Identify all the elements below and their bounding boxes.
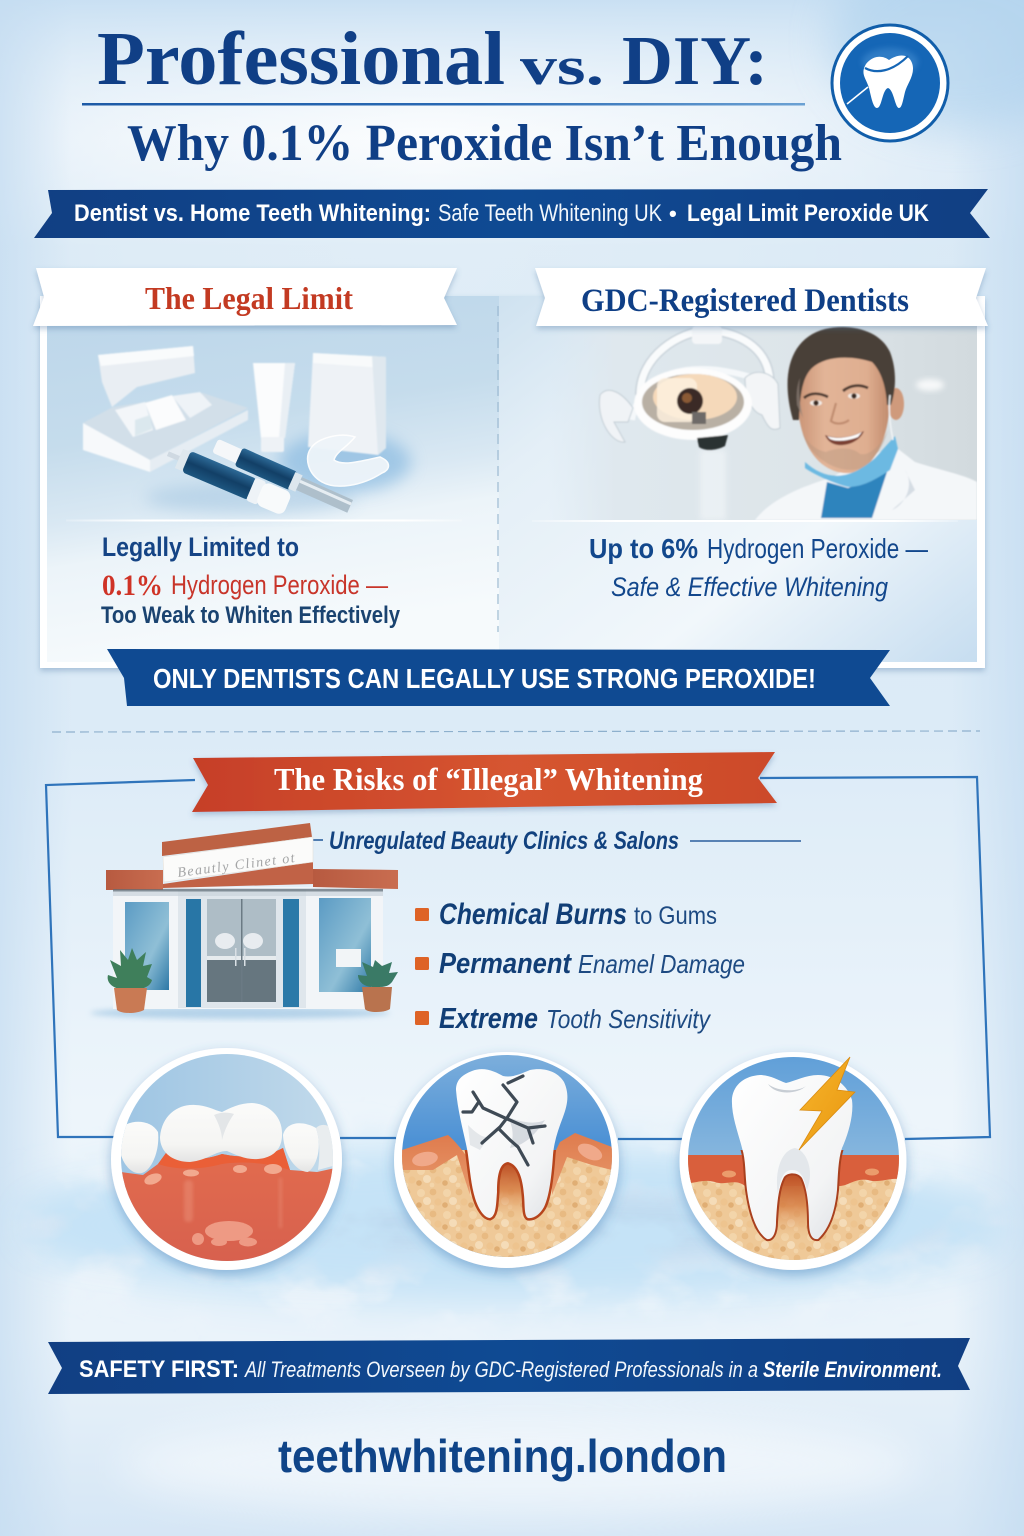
title: DIY:	[622, 23, 768, 100]
website url: teethwhitening.london	[278, 1430, 727, 1482]
text: dentists: Hydrogen Peroxide —	[707, 533, 928, 564]
text: dentists: Safe & Effective Whitening	[611, 572, 888, 602]
syringe front	[163, 442, 292, 516]
text: dentists: Up to 6%	[589, 533, 698, 564]
title: Professional	[97, 17, 505, 101]
plant right	[358, 960, 398, 1012]
icon: tooth badge	[832, 25, 948, 141]
top banner: Legal Limit Peroxide UK	[687, 200, 930, 227]
text: legal limit	[101, 532, 401, 629]
illustration: beauty salon	[90, 823, 398, 1019]
circle: chemical burns to gums	[110, 1045, 350, 1285]
text: legal limit: Too Weak to Whiten Effectively	[101, 602, 401, 629]
title	[97, 17, 768, 101]
dentist	[755, 327, 977, 520]
ribbon: GDC-Registered Dentists	[535, 268, 988, 326]
dental lamp	[599, 326, 780, 450]
building	[113, 887, 383, 1009]
subtitle: Why 0.1% Peroxide Isn’t Enough	[127, 115, 842, 172]
text: legal limit: Hydrogen Peroxide —	[171, 570, 388, 600]
kit box	[83, 346, 248, 472]
ribbon: The Legal Limit	[33, 268, 457, 326]
tube	[253, 363, 295, 452]
ribbon: risks heading	[192, 752, 777, 812]
item: sensitivity: Tooth Sensitivity	[546, 1004, 712, 1034]
top banner: Dentist vs. Home Teeth Whitening:	[74, 200, 431, 227]
list: risks	[415, 898, 745, 1035]
circle: cracked tooth enamel damage	[394, 1050, 620, 1275]
item: sensitivity: Extreme	[439, 1003, 538, 1035]
divider line right	[532, 520, 958, 522]
item: enamel damage: Permanent	[439, 948, 572, 980]
photo: dentist with lamp	[598, 326, 977, 520]
roof	[106, 870, 163, 890]
panel: comparison	[40, 296, 985, 668]
item: chemical burns: to Gums	[634, 902, 717, 930]
title underline	[82, 103, 805, 106]
item: enamel damage	[415, 948, 745, 980]
top banner	[34, 189, 990, 238]
banner: only dentists: ONLY DENTISTS CAN LEGALLY USE STRONG PEROXIDE!	[153, 663, 816, 694]
section divider	[52, 731, 980, 732]
shop sign	[162, 823, 313, 882]
plant left	[108, 948, 152, 1013]
banner: safety first	[48, 1338, 970, 1394]
mouth tray	[308, 435, 388, 486]
banner: safety first: Sterile Environment.	[763, 1357, 942, 1382]
ribbon: The Legal Limit: The Legal Limit	[145, 280, 353, 316]
frame: risks section	[46, 777, 990, 1139]
text: dentists	[589, 533, 928, 602]
text: legal limit: 0.1%	[102, 569, 163, 602]
ribbon: GDC-Registered Dentists: GDC-Registered Dentists	[581, 283, 909, 319]
title: vs.	[520, 36, 604, 96]
syringe back	[211, 437, 354, 515]
banner: only dentists	[107, 649, 890, 706]
illustration: DIY whitening kit	[83, 346, 411, 516]
top banner: •	[669, 201, 677, 226]
item: sensitivity	[415, 1003, 712, 1035]
text: legal limit: Legally Limited to	[102, 532, 299, 562]
shop sign: Beautly Clinet ot	[177, 851, 297, 881]
ribbon: risks heading: The Risks of “Illegal” Whitening	[274, 761, 703, 797]
circle: extreme tooth sensitivity	[680, 1050, 906, 1275]
top banner: Safe Teeth Whitening UK	[438, 200, 662, 227]
icon: lightning bolt	[799, 1057, 855, 1150]
item: chemical burns: Chemical Burns	[439, 898, 627, 931]
divider line left	[66, 520, 462, 522]
subheading: salons: Unregulated Beauty Clinics & Salons	[329, 827, 679, 855]
banner: safety first: All Treatments Overseen by GDC-Registered Professionals in a	[243, 1357, 758, 1382]
banner: safety first: SAFETY FIRST:	[79, 1356, 239, 1383]
item: enamel damage: Enamel Damage	[578, 949, 745, 979]
pouch	[308, 353, 386, 455]
